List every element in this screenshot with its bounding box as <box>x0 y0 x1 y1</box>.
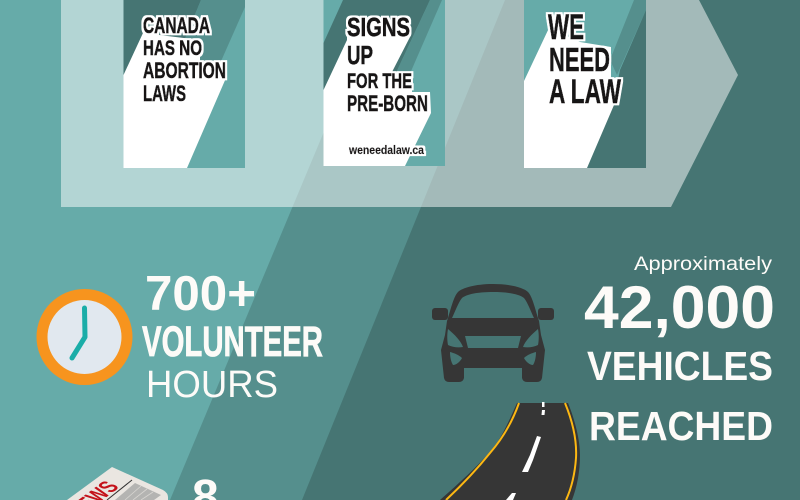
stat: vehicles reached: REACHED <box>589 403 773 449</box>
stat: vehicles reached: Approximately <box>634 254 773 275</box>
billboard 3 text: NEED <box>549 41 610 78</box>
billboard 3 text: A LAW <box>549 73 622 111</box>
stat: volunteer hours: HOURS <box>146 364 278 406</box>
stat: volunteer hours: VOLUNTEER <box>142 318 323 366</box>
icon: clock <box>36 289 132 385</box>
panel: billboard 1 <box>124 0 245 168</box>
stat: vehicles reached: 42,000 <box>584 274 775 341</box>
icon: road <box>440 402 580 500</box>
billboard 1 text: ABORTION <box>143 58 226 83</box>
icon: car <box>441 284 545 382</box>
billboard 2 text: weneedalaw.ca <box>348 143 424 157</box>
billboard 2 text: FOR THE <box>347 70 412 93</box>
translucent arrow banner <box>61 0 738 207</box>
stat: vehicles reached <box>584 254 775 449</box>
billboard 1 text: HAS NO <box>143 37 202 60</box>
billboard 1 text <box>143 13 226 106</box>
icon: car mirrors <box>432 308 554 320</box>
billboard 2 text: SIGNS <box>347 12 410 42</box>
billboard 2 text <box>347 12 428 157</box>
stat: volunteer hours: 700+ <box>145 267 256 321</box>
panel: billboard 2 <box>324 0 445 166</box>
billboard 3 text: WE <box>548 8 584 47</box>
stat: volunteer hours <box>142 267 323 406</box>
billboard 2 text: UP <box>347 40 373 70</box>
billboard 1 text: CANADA <box>143 13 210 38</box>
stat: vehicles reached: VEHICLES <box>587 343 773 389</box>
billboard 1 text: LAWS <box>143 81 186 106</box>
billboard 2 text: PRE-BORN <box>347 91 428 116</box>
panel: billboard 3 <box>524 0 646 168</box>
billboard 3 text <box>548 8 622 111</box>
